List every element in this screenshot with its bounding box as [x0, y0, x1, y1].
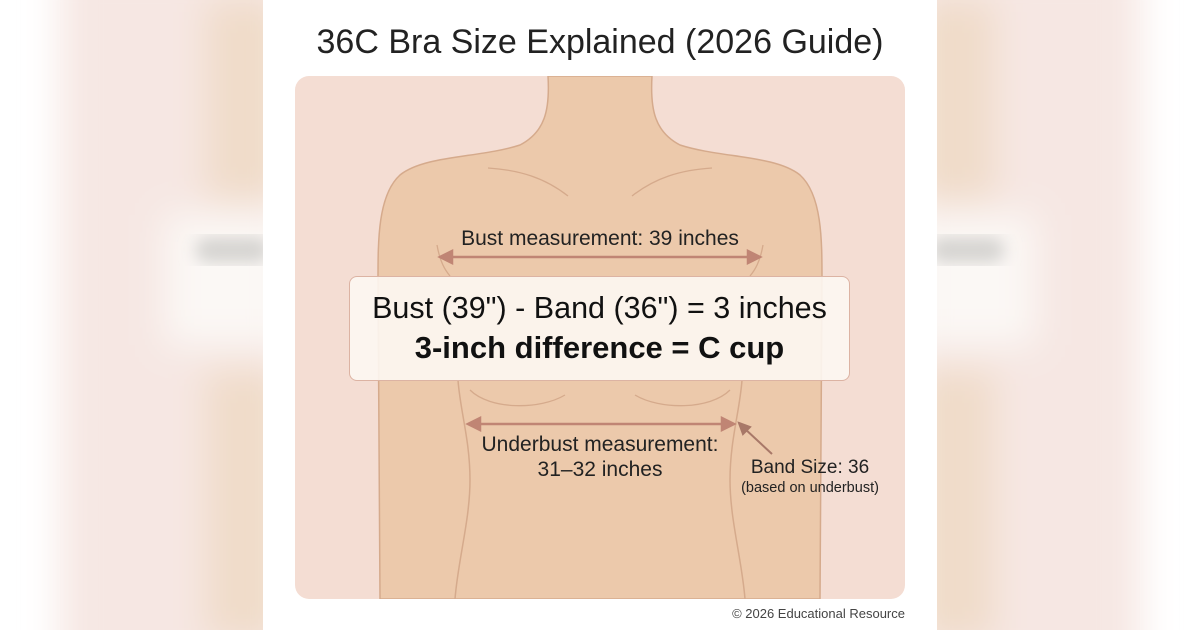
callout box: [349, 276, 850, 381]
title: 36C Bra Size Explained (2026 Guide): [316, 23, 884, 61]
callout formula: Bust (39") - Band (36") = 3 inches: [372, 291, 827, 325]
footer credit: © 2026 Educational Resource: [732, 606, 905, 621]
band size label: (based on underbust): [741, 480, 879, 496]
illustration panel: [295, 76, 905, 599]
body silhouette: [378, 76, 822, 599]
center panel: [263, 0, 937, 630]
underbust label: 31–32 inches: [538, 458, 662, 481]
underbust label: [482, 433, 718, 481]
bust label: Bust measurement: 39 inches: [461, 227, 739, 250]
underbust label: Underbust measurement:: [482, 433, 718, 456]
underbust arrow: [468, 418, 734, 430]
band pointer arrow: [739, 423, 772, 454]
callout result: 3-inch difference = C cup: [415, 330, 784, 365]
band size label: [741, 457, 879, 496]
band size label: Band Size: 36: [751, 457, 869, 478]
bust arrow: [440, 251, 760, 263]
